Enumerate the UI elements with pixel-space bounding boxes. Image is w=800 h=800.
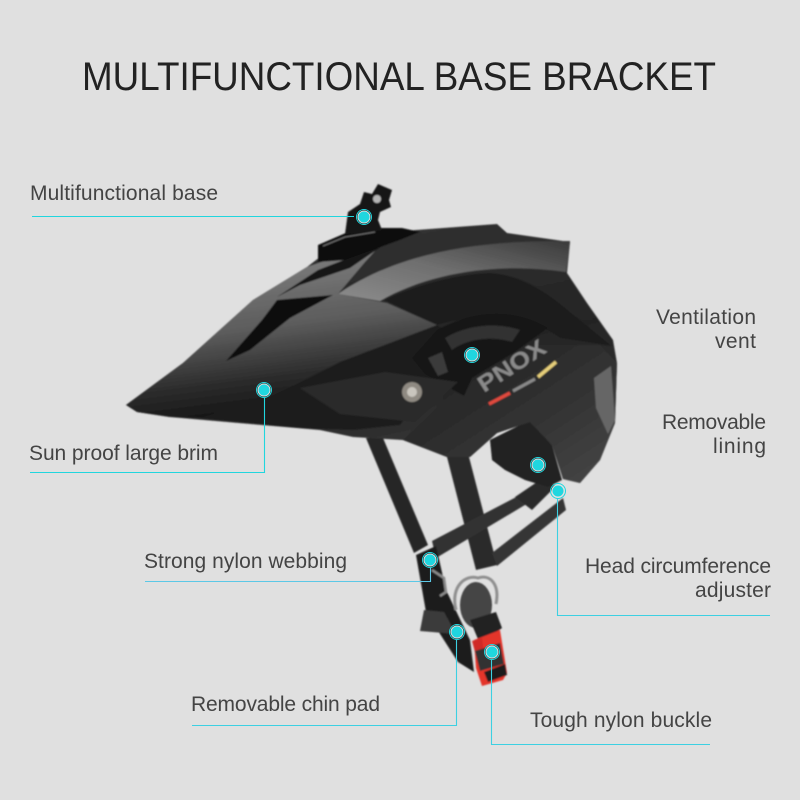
helmet shell [126,224,617,483]
shell top band [338,241,570,301]
label: head circumference adjuster: adjuster [695,579,771,602]
label: removable lining: lining [713,435,766,458]
upper shell panel [384,273,612,346]
brand logo: PNOX [473,334,551,397]
multifunctional mount [318,184,420,262]
rear shell lower panel [403,345,617,483]
brim vents [226,295,333,361]
ventilation opening [412,314,548,396]
side panel and screw [300,372,458,422]
brim lower shadow [200,325,460,430]
callout lines [30,216,770,744]
brim [126,240,437,418]
title: MULTIFUNCTIONAL BASE BRACKET [82,55,716,99]
buckle [472,630,507,686]
brand logo [473,334,556,404]
label: ventilation vent [656,306,756,353]
ratchet [428,352,448,376]
helmet illustration [126,184,617,686]
chin straps [366,438,566,672]
label: multifunctional base: Multifunctional base [30,182,218,205]
label: head circumference adjuster: Head circumference [585,555,771,578]
label: head circumference adjuster [585,555,771,602]
label: strong nylon webbing: Strong nylon webbing [144,550,347,573]
label: ventilation vent: vent [715,330,756,353]
label: ventilation vent: Ventilation [656,306,756,329]
label: tough nylon buckle: Tough nylon buckle [530,709,712,732]
callout dots [256,210,566,660]
rear vent grey mesh [594,366,615,434]
label: sun proof large brim: Sun proof large brim [29,442,218,465]
label: removable lining [662,411,766,458]
internal vent mesh [445,325,520,350]
label: removable chin pad: Removable chin pad [191,693,380,716]
interior lining [490,420,562,487]
label: removable lining: Removable [662,411,766,434]
